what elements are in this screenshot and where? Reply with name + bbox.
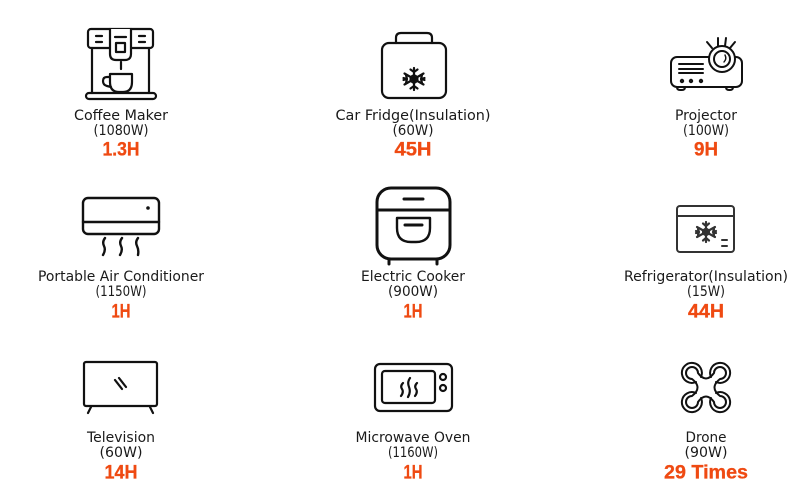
wattage: drone: (90W) [684,445,728,461]
label: air conditioner: Portable Air Conditioner [38,269,204,285]
icon: air conditioner [83,198,159,255]
panel: television [84,362,157,484]
runtime: electric cooker: 1H [404,302,422,322]
wattage: coffee maker: (1080W) [94,123,148,139]
wattage: air conditioner: (1150W) [96,284,146,300]
runtime: air conditioner: 1H [112,302,130,322]
wattage: refrigerator: (15W) [687,284,725,300]
label: refrigerator: Refrigerator(Insulation) [624,269,788,285]
label: car fridge: Car Fridge(Insulation) [336,108,490,124]
icon: television [84,362,157,413]
runtime: coffee maker: 1.3H [102,140,140,160]
wattage: projector: (100W) [683,123,729,139]
panel: portable air conditioner [38,198,204,322]
icon: car fridge [382,33,446,98]
icon: refrigerator [677,206,734,252]
panel: car fridge [336,33,490,160]
runtime: microwave oven: 1H [404,462,422,484]
label: microwave oven: Microwave Oven [356,430,470,446]
label: projector: Projector [675,108,737,124]
icon: projector [671,38,742,90]
panel: refrigerator [624,206,788,322]
panel: drone [664,363,748,484]
wattage: television: (60W) [100,445,142,461]
wattage: electric cooker: (900W) [388,284,438,300]
icon: microwave oven [375,364,452,411]
panel: electric cooker [361,188,465,322]
icon: electric cooker [377,188,450,264]
label: coffee maker: Coffee Maker [74,108,168,124]
label: electric cooker: Electric Cooker [361,269,465,285]
wattage: microwave oven: (1160W) [388,445,438,461]
runtime: refrigerator: 44H [688,302,724,322]
icon: drone [682,363,730,412]
panel: microwave oven [356,364,470,484]
runtime: drone: 29 Times [664,462,748,484]
runtime: television: 14H [104,462,138,484]
wattage: car fridge: (60W) [392,123,434,139]
panel: projector [671,38,742,160]
icon: coffee maker [86,29,156,99]
label: drone: Drone [686,430,727,446]
panel: coffee maker [74,29,168,160]
runtime: car fridge: 45H [394,140,432,160]
label: television: Television [86,430,155,446]
runtime: projector: 9H [694,140,718,160]
